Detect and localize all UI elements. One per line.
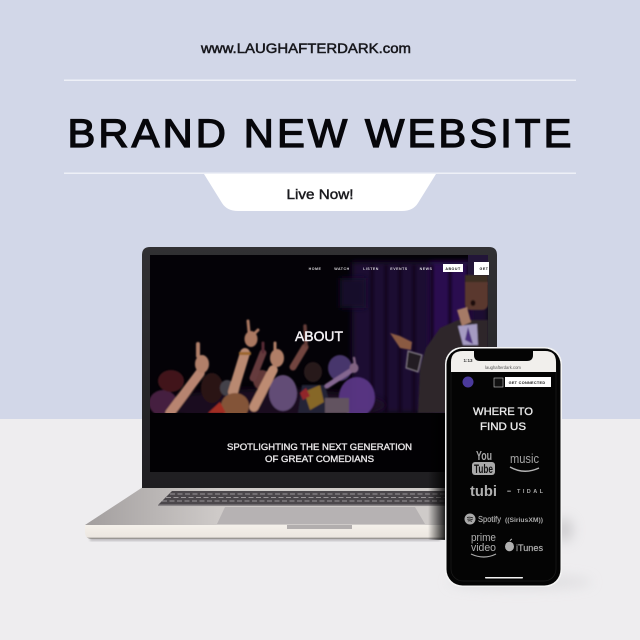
screen tagline: OF GREAT COMEDIANS [265,454,374,464]
stage photo [149,255,488,421]
site navigation [309,262,489,275]
background: wall [0,0,640,419]
laptop base deck [85,487,555,525]
get connected button: GET CONNECTED [509,381,545,385]
phone status bar [451,351,556,372]
keyboard [158,491,482,506]
site navigation: ABOUT [445,267,461,271]
crowd [149,321,385,421]
trackpad [217,507,425,524]
logo: Amazon Music: music [510,451,539,466]
logo: iTunes: iTunes [516,543,543,554]
logo: Prime Video: video [471,542,496,554]
logo: Spotify [464,514,502,524]
website url: www.LAUGHAFTERDARK.com [200,41,411,56]
logo: YouTube: Tube [474,462,493,476]
where to find us heading: WHERE TO [473,406,533,418]
logo: YouTube: You [476,448,492,463]
logo: Spotify: Spotify [478,514,502,524]
logo: Tidal: •• [507,489,511,495]
phone address bar: laughafterdark.com [485,365,521,370]
laptop [85,247,497,542]
live now text: Live Now! [286,186,354,202]
performer [390,275,488,413]
logo: Tidal: TIDAL [517,489,544,495]
logo: YouTube [472,448,495,476]
get connected button [505,377,551,387]
smartphone [445,347,562,587]
laptop front edge [85,525,555,539]
logo: Tubi: tubi [470,483,497,500]
screen tagline: SPOTLIGHTING THE NEXT GENERATION [227,442,412,452]
home indicator [485,577,523,578]
site navigation: NEWS [420,267,432,271]
logo: iTunes [505,539,543,554]
smartphone: 1:13 [463,358,473,363]
live now badge [204,174,436,211]
site navigation: EVENTS [390,267,408,271]
logo: Prime Video [471,532,496,557]
logo: SiriusXM: ((SiriusXM)) [505,517,543,524]
site navigation: LISTEN [363,267,379,271]
laptop shadow [90,537,440,541]
laptop screen [149,255,489,472]
desk shadow under phone [448,575,592,589]
site navigation: WATCH [334,267,350,271]
soft shadow right of phone [555,518,573,542]
phone notch [474,350,533,361]
site navigation: GET [480,267,489,271]
laptop lid [142,247,497,488]
site logo [462,376,474,388]
phone shadow on laptop [428,413,446,540]
trackpad notch [287,525,352,529]
where to find us heading: FIND US [480,421,526,433]
site navigation: HOME [309,267,321,271]
about heading: ABOUT [295,328,343,344]
background: desk [0,419,640,640]
logo: Amazon Music [510,451,539,471]
menu button [494,378,503,387]
title: BRAND NEW WEBSITE [68,112,574,156]
screen tagline [227,442,412,464]
logo: Prime Video: prime [471,532,496,544]
where to find us heading [473,406,533,433]
